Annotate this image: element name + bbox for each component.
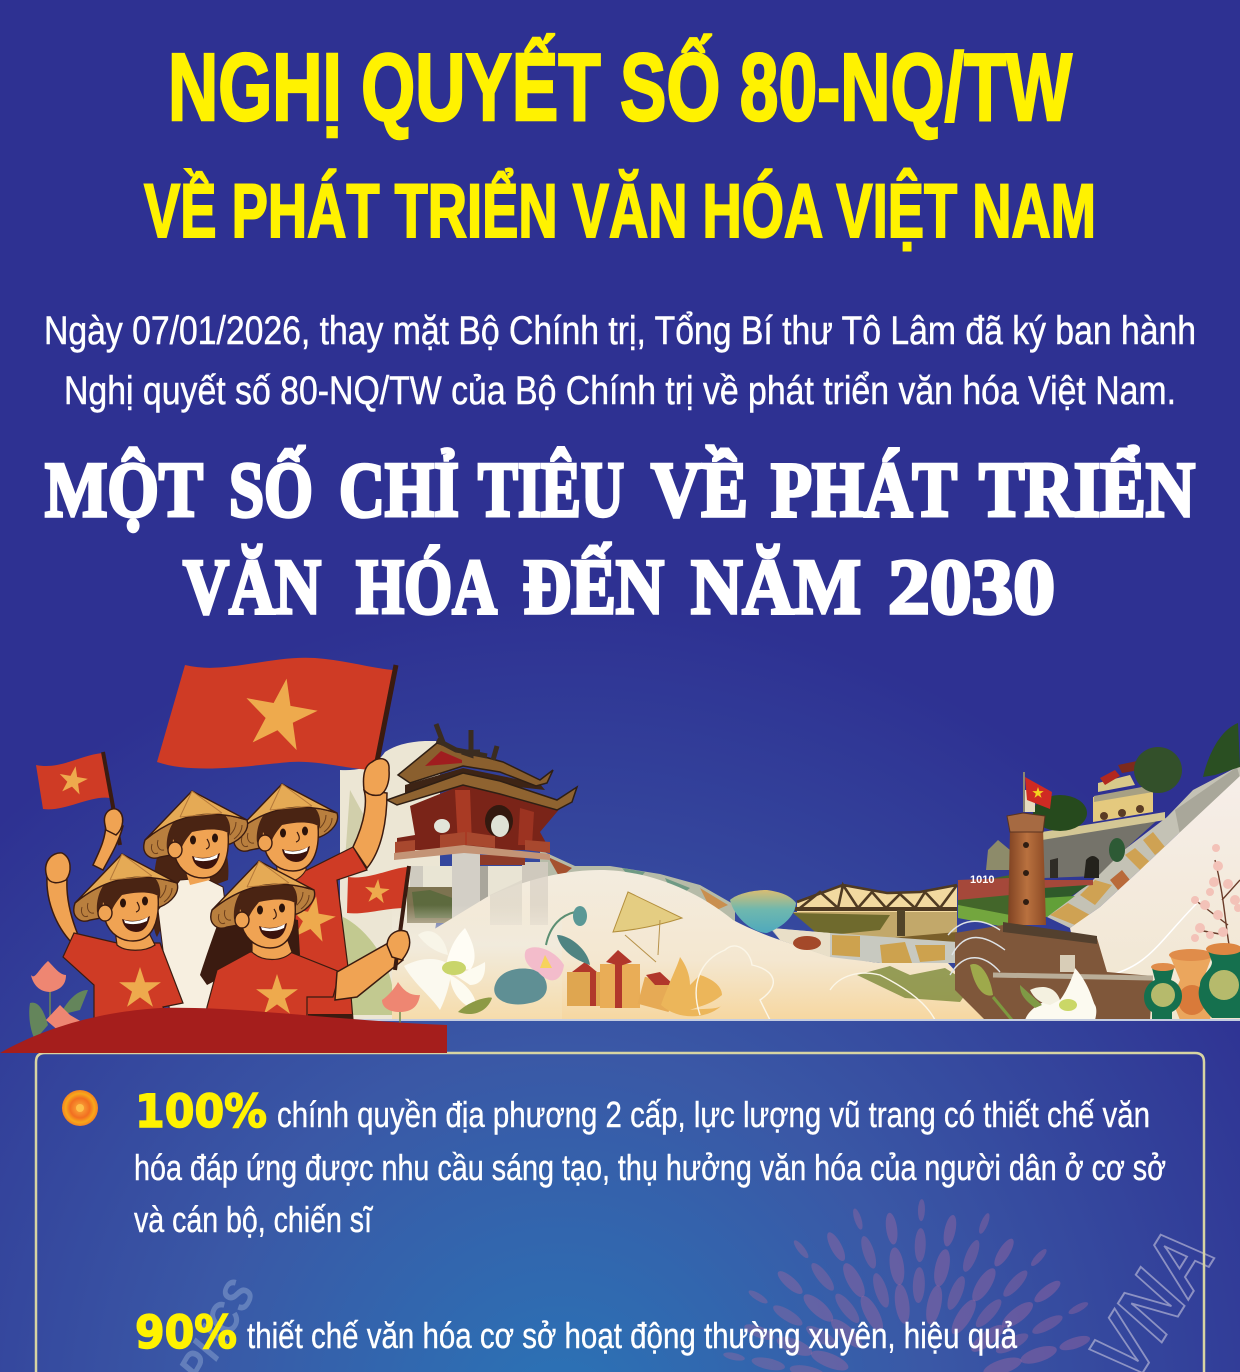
lily left — [404, 928, 492, 1014]
section heading: CHỈ — [339, 446, 459, 533]
lotus pod — [730, 890, 796, 933]
web line-art — [948, 921, 1005, 975]
illustration: people with flags — [0, 658, 447, 1053]
bridge scene — [793, 885, 957, 945]
target 90%: thiết chế văn hóa cơ sở hoạt động thường xuyên, hiệu quả — [247, 1315, 1018, 1356]
section heading: VĂN — [183, 543, 321, 630]
panel frame — [36, 1053, 1204, 1372]
large flag — [157, 658, 396, 807]
tower base — [955, 922, 1153, 1020]
panel: targets — [30, 1051, 1204, 1372]
tile band near temple — [540, 850, 735, 925]
section heading: HÓA — [356, 543, 497, 630]
flag on tower — [1025, 777, 1052, 809]
temple balcony — [395, 832, 550, 855]
boy in front — [46, 853, 183, 1025]
section heading: TIÊU — [478, 446, 624, 533]
target 90% — [135, 1306, 1018, 1359]
watermark dots — [722, 1199, 1092, 1372]
tile band under bridge — [770, 928, 957, 963]
section heading: TRIỂN — [979, 446, 1195, 533]
section heading: VỀ — [651, 446, 748, 533]
temple roof ornaments — [436, 724, 497, 760]
section heading: MỘT — [45, 446, 203, 533]
bullet icon — [62, 1090, 98, 1126]
lotus flower and leaves — [494, 906, 590, 1004]
sand hill left — [400, 870, 1000, 1020]
target 100%: 100% — [135, 1085, 267, 1138]
right hill tile band — [1047, 767, 1240, 928]
line-art flower — [696, 946, 935, 1020]
man in back — [234, 759, 389, 1020]
gifts — [567, 950, 676, 1012]
illustration: cultural landscape — [340, 723, 1240, 1021]
section heading: PHÁT — [771, 446, 957, 533]
temple lower roof — [387, 773, 577, 810]
temple reflection through hill — [490, 880, 522, 925]
small left flag — [36, 752, 120, 845]
temple upper hall — [397, 785, 562, 850]
red banner — [0, 1008, 447, 1053]
temple — [387, 724, 577, 925]
lotus flowers — [29, 961, 420, 1040]
temple lower level — [410, 866, 423, 888]
flag tower — [1007, 772, 1052, 925]
green plants patch — [857, 966, 972, 1002]
sand hill right — [1070, 776, 1240, 1020]
section heading: ĐẾN — [523, 543, 664, 630]
temple space between roofs — [405, 768, 545, 795]
target 100%: và cán bộ, chiến sĩ — [134, 1199, 374, 1240]
garden behind tower — [958, 840, 1093, 928]
section heading: 2030 — [888, 543, 1055, 630]
section heading: SỐ — [229, 446, 313, 533]
fog at temple base — [392, 905, 562, 1020]
cherry blossom branch — [1191, 844, 1240, 950]
small right flag — [347, 866, 410, 970]
temple upper roof — [398, 743, 553, 786]
ground edge — [340, 1019, 1240, 1021]
target 100% — [134, 1085, 1166, 1240]
vases — [1144, 943, 1240, 1020]
top-right tree — [1203, 723, 1240, 777]
target 90%: 90% — [135, 1306, 237, 1359]
lily right — [970, 964, 1096, 1020]
intro paragraph — [44, 309, 1196, 413]
golden lotus petals — [661, 957, 722, 1016]
conical hat — [613, 892, 682, 962]
woman in back — [93, 791, 248, 1015]
section heading — [45, 446, 1195, 630]
left backdrop behind temple — [340, 741, 440, 1020]
title — [144, 33, 1096, 254]
section heading: NĂM — [691, 543, 861, 630]
garden behind tower: 1010 — [970, 874, 994, 886]
red banner overlap — [30, 1051, 447, 1053]
citadel wall and gate — [1033, 747, 1182, 878]
girl in front — [200, 861, 403, 1020]
